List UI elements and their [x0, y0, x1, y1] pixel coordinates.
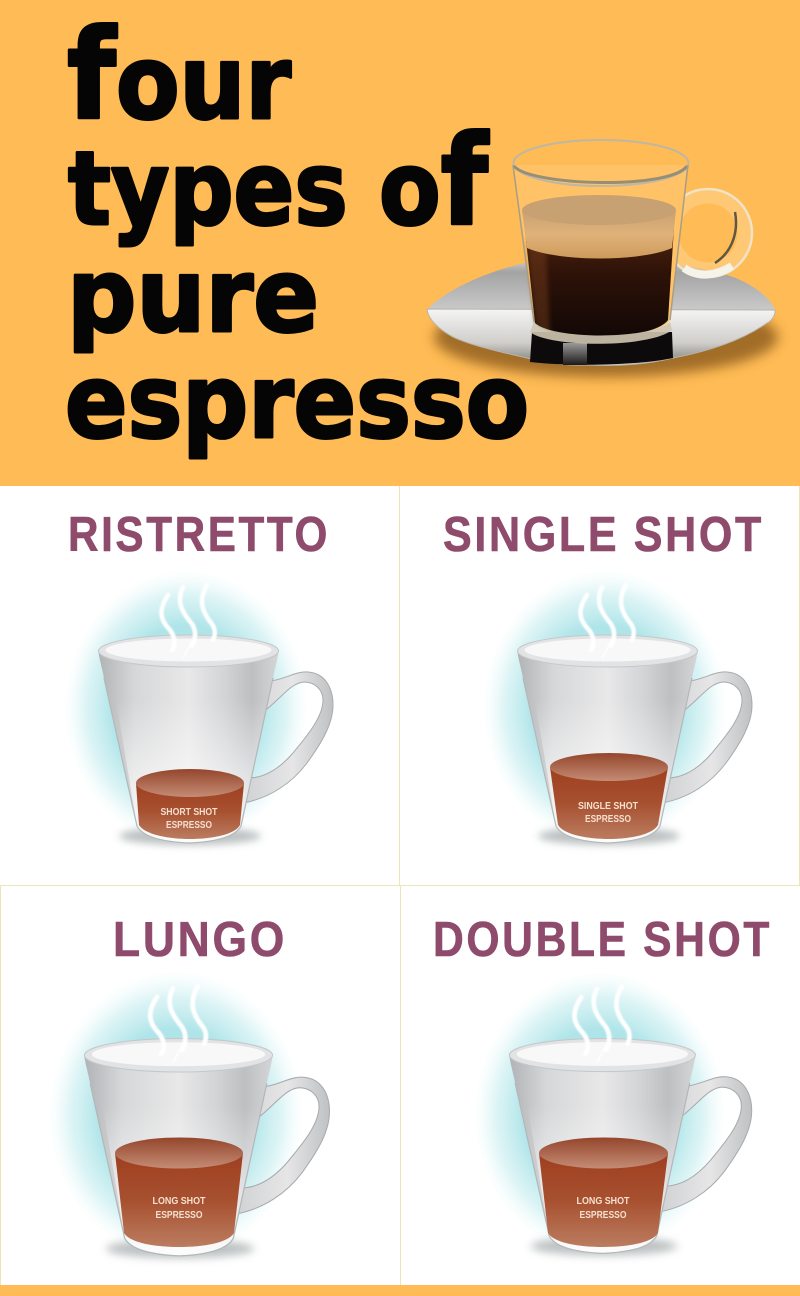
panel: double shot — [433, 913, 772, 1257]
mug: double shot espresso: ESPRESSO — [580, 1210, 627, 1221]
mug: long shot espresso — [48, 971, 329, 1259]
illustration: espresso in a glass cup on a saucer — [427, 140, 778, 377]
mug: short shot espresso: SHORT SHOT — [160, 807, 218, 818]
mug: short shot espresso — [64, 570, 333, 846]
mug: long shot espresso: LONG SHOT — [152, 1196, 206, 1207]
heading: lungo: LUNGO — [113, 913, 287, 967]
header banner — [0, 0, 800, 486]
title: types of — [68, 110, 490, 254]
panel grid lines — [0, 486, 800, 1285]
mug: long shot espresso: ESPRESSO — [156, 1210, 203, 1221]
panel: ristretto — [64, 508, 333, 846]
title: four — [67, 4, 291, 148]
heading: ristretto: RISTRETTO — [68, 508, 330, 562]
panel: lungo — [48, 913, 329, 1259]
title — [65, 4, 529, 462]
mug: single shot espresso: SINGLE SHOT — [578, 801, 638, 812]
title: espresso — [65, 343, 529, 462]
mug: short shot espresso: ESPRESSO — [166, 820, 212, 831]
bottom band — [0, 1285, 800, 1296]
heading: single shot: SINGLE SHOT — [443, 508, 764, 562]
title: pure — [67, 237, 319, 356]
mug: double shot espresso — [474, 971, 752, 1257]
mug: double shot espresso: LONG SHOT — [576, 1196, 630, 1207]
mug: single shot espresso: ESPRESSO — [585, 814, 631, 825]
mug: single shot espresso — [483, 570, 752, 846]
panel: single shot — [443, 508, 764, 846]
